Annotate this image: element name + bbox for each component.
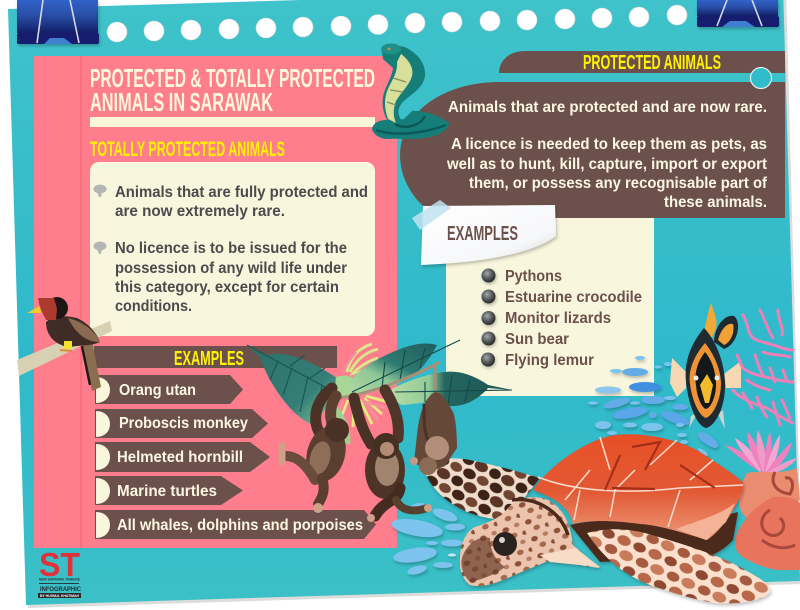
eye — [493, 532, 517, 556]
examples card: Estuarine crocodile — [505, 289, 642, 306]
monkey: middle — [354, 390, 432, 522]
illustration: sea flower and rose coral — [725, 430, 800, 570]
logo: New Sarawak Tribune infographic: ST — [39, 546, 80, 583]
examples banner: EXAMPLES — [174, 348, 244, 370]
illustration: cobra — [372, 44, 449, 139]
logo: New Sarawak Tribune infographic — [38, 546, 81, 598]
text card: definition: are now extremely rare. — [115, 203, 285, 220]
list: totally protected examples: Proboscis monkey — [119, 415, 248, 432]
illustration: water splashes — [390, 356, 720, 576]
neck and head — [460, 497, 600, 586]
title: ANIMALS IN SARAWAK — [90, 87, 273, 117]
palm fronds — [336, 344, 388, 428]
underside — [570, 512, 738, 562]
icon: left binder clip — [17, 0, 99, 44]
monkey: hanging right — [410, 392, 457, 475]
illustration: sea turtle — [423, 434, 770, 603]
note: examples label — [412, 200, 556, 265]
panel: protected animals — [400, 51, 785, 396]
punched holes — [107, 5, 687, 42]
list: totally protected examples: Orang utan — [119, 382, 196, 399]
examples card: Sun bear — [505, 331, 569, 348]
text card: definition — [90, 162, 375, 336]
list: totally protected examples — [95, 375, 376, 539]
logo: New Sarawak Tribune infographic: BY HUSNUL KHATIMAH — [40, 594, 79, 598]
shell — [533, 434, 743, 540]
front flipper — [587, 529, 770, 603]
title: PROTECTED & TOTALLY PROTECTED — [90, 63, 375, 93]
examples card: Monitor lizards — [505, 310, 611, 327]
text blob: licence details: them, or possess any recognisable part of — [469, 175, 768, 192]
examples banner — [94, 346, 337, 370]
monkey: left — [282, 388, 352, 513]
panel: totally protected animals — [34, 56, 397, 548]
list: totally protected examples: All whales, dolphins and porpoises — [117, 517, 363, 534]
title — [90, 63, 375, 117]
illustration: tropical leaves — [247, 340, 512, 445]
text card: definition: Animals that are fully protected and — [115, 184, 368, 201]
text blob: licence details — [400, 82, 785, 218]
logo: New Sarawak Tribune infographic: NEW SARAWAK TRIBUNE — [39, 578, 81, 582]
logo: New Sarawak Tribune infographic: INFOGRAPHIC — [40, 586, 81, 593]
text blob: licence details: A licence is needed to keep them as pets, as — [451, 136, 767, 153]
text blob: licence details: well as to hunt, kill, capture, import or export — [446, 156, 768, 173]
heading: totally protected animals: TOTALLY PROTECTED ANIMALS — [90, 138, 285, 161]
text card: definition: possession of any wild life under — [115, 260, 347, 277]
text blob: licence details: these animals. — [664, 194, 767, 211]
list: totally protected examples: Marine turtles — [117, 483, 217, 500]
heading: protected animals: PROTECTED ANIMALS — [583, 52, 721, 74]
text card: definition: No licence is to be issued for the — [115, 240, 347, 257]
examples card: Pythons — [505, 268, 562, 285]
icon: right binder clip — [697, 0, 779, 27]
examples card — [446, 215, 654, 396]
illustration: hornbill on branch — [17, 297, 112, 391]
text card: definition: this category, except for certain — [115, 279, 339, 296]
rear flipper — [423, 458, 540, 519]
examples card: Flying lemur — [505, 352, 594, 369]
text card: definition: conditions. — [115, 298, 192, 315]
heading: protected animals — [499, 51, 785, 74]
illustration: clownfish — [670, 303, 741, 429]
note: examples label: EXAMPLES — [447, 223, 518, 245]
list: totally protected examples: Helmeted hornbill — [117, 449, 243, 466]
illustration: monkeys — [282, 388, 457, 522]
illustration: pink coral — [733, 310, 793, 425]
icon: teal dot — [750, 68, 772, 88]
text blob: licence details: Animals that are protected and are now rare. — [448, 99, 767, 116]
